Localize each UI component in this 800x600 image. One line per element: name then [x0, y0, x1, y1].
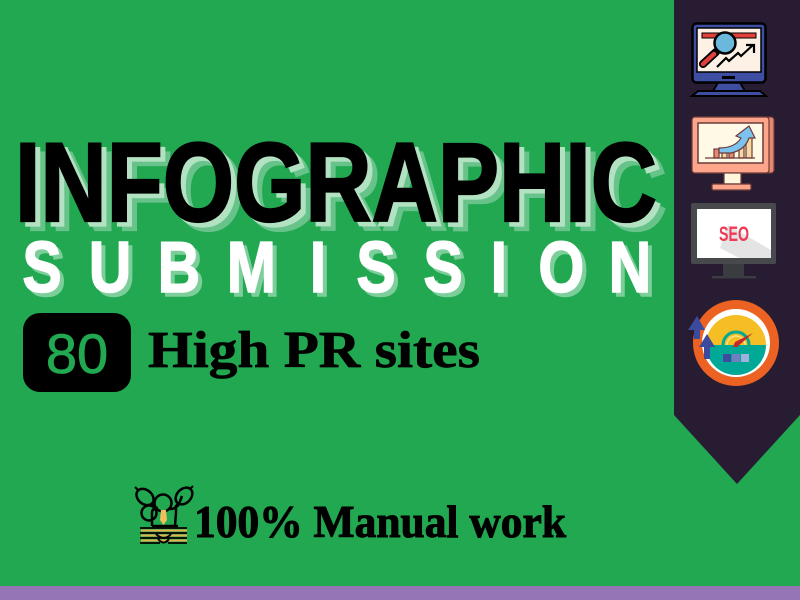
badge: 80: [23, 313, 131, 392]
heading: High PR sites: High PR sites: [148, 322, 480, 379]
icon: peach monitor with rising arrow chart: [692, 117, 774, 190]
title: INFOGRAPHIC: INFOGRAPHIC: [15, 120, 657, 245]
subtitle: SUBMISSION: SUBMISSION: [22, 226, 651, 307]
bottom purple band: [0, 586, 800, 600]
title: INFOGRAPHIC: INFOGRAPHIC: [20, 124, 662, 250]
text: 100% Manual work: 100% Manual work: [194, 497, 566, 547]
icon: monitor with magnifier and growth chart: [692, 24, 766, 96]
icon: speedometer badge with arrows: [688, 300, 779, 386]
title: INFOGRAPHIC: INFOGRAPHIC: [25, 129, 667, 254]
badge: 80: 80: [46, 322, 108, 385]
subtitle: SUBMISSION: SUBMISSION: [26, 230, 655, 311]
icon: person with plants on book: [133, 484, 196, 543]
panel: dark ribbon sidebar: [674, 0, 800, 484]
icon: SEO monitor: [691, 203, 776, 278]
icon: SEO monitor: SEO: [719, 223, 749, 246]
